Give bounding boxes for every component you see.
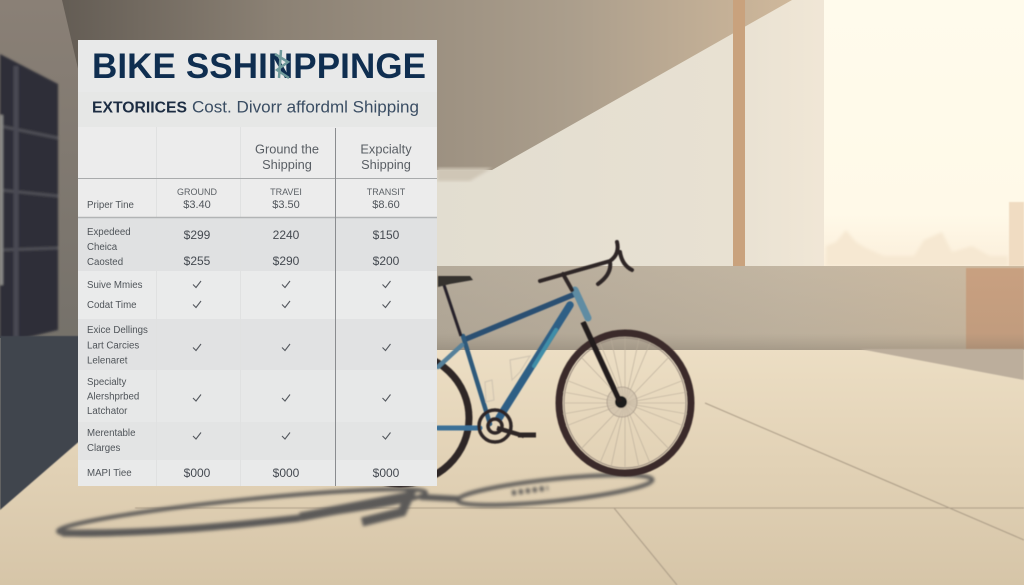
row: expected costs — [87, 227, 400, 268]
row: mapi tiee: MAPI Tiee — [87, 468, 132, 479]
row: specialty: Specialty — [87, 377, 126, 388]
row: specialty: Alershprbed — [87, 392, 139, 402]
bicycle — [331, 242, 691, 484]
column heading: ground: Shipping — [262, 157, 312, 172]
column heading: specialty: Expcialty — [360, 142, 412, 156]
row: expected costs: Expedeed — [87, 227, 131, 238]
left wall — [0, 0, 90, 345]
table header band — [78, 127, 437, 218]
chainring and crank — [479, 410, 536, 442]
row: mapi tiee: $000 — [373, 466, 400, 480]
column heading: ground: Ground the — [255, 142, 319, 156]
table rules — [78, 127, 437, 486]
row: expected costs: $290 — [273, 254, 300, 268]
title leaf pattern — [275, 50, 289, 78]
row: merentable — [87, 428, 390, 454]
row: expected costs: Caosted — [87, 257, 123, 268]
row: codat time: Codat Time — [87, 300, 137, 311]
row: transit prices: $3.40 — [183, 199, 211, 211]
row: expected costs: $299 — [184, 228, 211, 242]
low wall base shade — [437, 266, 1024, 350]
row: mapi tiee: $000 — [184, 466, 211, 480]
row: transit prices: TRAVEI — [270, 187, 302, 197]
bright window with skyline — [824, 0, 1024, 268]
ceiling — [55, 0, 792, 170]
subtitle: EXTORIICES — [92, 100, 187, 116]
column heading: specialty — [360, 142, 412, 172]
row: transit prices — [87, 187, 406, 211]
column heading: specialty: Shipping — [361, 157, 411, 172]
low wall orange end — [966, 268, 1024, 350]
row: transit prices: $3.50 — [272, 199, 300, 211]
row: transit prices: $8.60 — [372, 199, 400, 211]
row: specialty — [87, 377, 390, 417]
row: codat time — [87, 300, 390, 311]
row: specialty: Latchator — [87, 406, 128, 417]
row: suive mmies: Suive Mmies — [87, 280, 143, 291]
rear wheel — [331, 352, 469, 484]
low wall — [437, 266, 1024, 350]
fork — [583, 322, 620, 402]
panel background — [78, 40, 437, 486]
panel: comparison table — [78, 40, 437, 486]
handlebars — [540, 242, 632, 290]
row: expected costs: 2240 — [273, 228, 300, 242]
back wall — [430, 0, 830, 270]
title: BIKE SSHINPPINGE — [92, 47, 426, 86]
left floor shadow — [0, 336, 90, 510]
row: suive mmies — [87, 280, 390, 291]
dark window — [0, 54, 58, 344]
row: mapi tiee — [87, 466, 400, 480]
header band — [78, 92, 437, 127]
row: transit prices: Priper Tine — [87, 200, 134, 211]
row: transit prices: GROUND — [177, 187, 217, 197]
subtitle — [92, 98, 419, 116]
bottle cages — [485, 356, 530, 402]
row: exice dellings: Lart Carcies — [87, 340, 139, 352]
row: exice dellings — [87, 325, 390, 366]
floor — [0, 338, 1024, 585]
row: exice dellings: Lelenaret — [87, 356, 128, 366]
row: expected costs: Cheica — [87, 242, 118, 253]
row: expected costs: $200 — [373, 254, 400, 268]
column heading: ground — [255, 142, 319, 172]
frame — [438, 290, 588, 428]
floor back shadow — [860, 349, 1024, 380]
row: transit prices: TRANSIT — [367, 187, 406, 197]
pillar — [733, 0, 745, 266]
ceiling lower edge shade — [437, 168, 492, 181]
row: expected costs: $150 — [373, 228, 400, 242]
row: merentable: Clarges — [87, 443, 121, 454]
seat post — [444, 285, 461, 336]
row: expected costs: $255 — [184, 254, 211, 268]
bike shadow — [57, 469, 654, 543]
row: mapi tiee: $000 — [273, 466, 300, 480]
saddle — [438, 276, 473, 287]
row: merentable: Merentable — [87, 428, 135, 439]
front wheel — [559, 333, 691, 473]
floor joints — [135, 403, 1024, 585]
subtitle: Cost. Divorr affordml Shipping — [192, 98, 419, 116]
table row bands — [78, 218, 437, 486]
row: exice dellings: Exice Dellings — [87, 325, 148, 336]
